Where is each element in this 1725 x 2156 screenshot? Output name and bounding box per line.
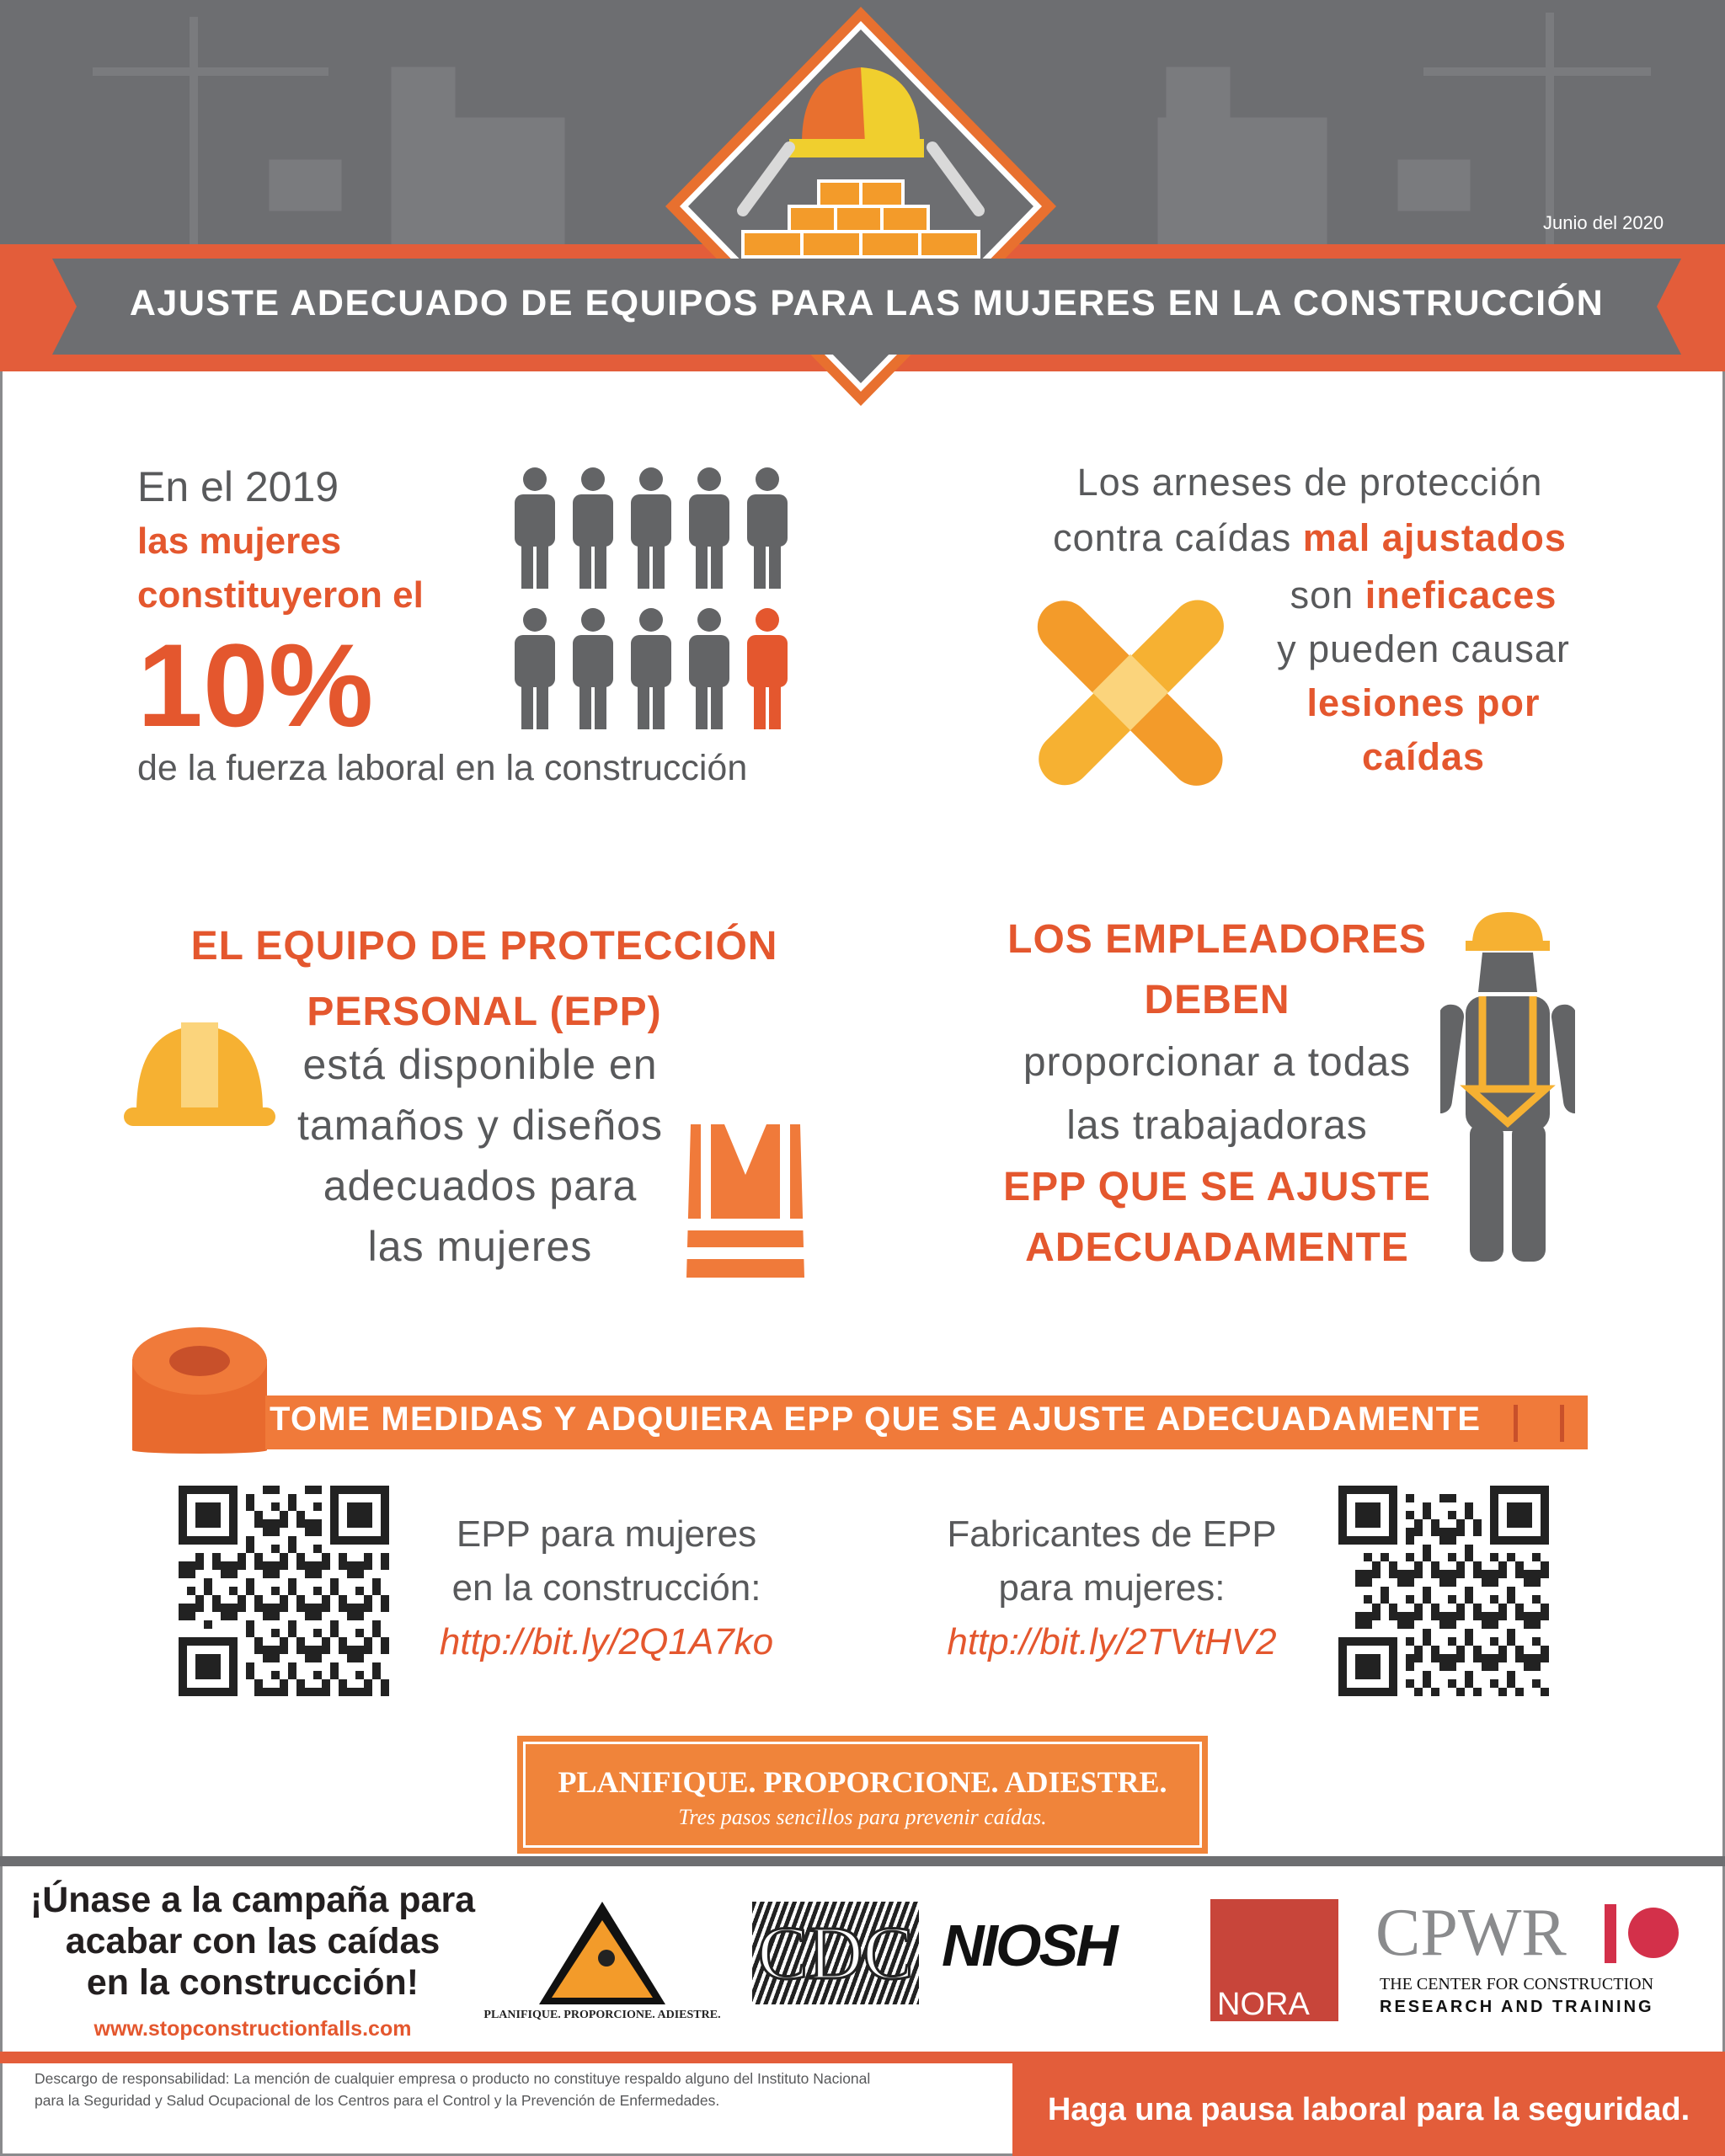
plan provide train box: Tres pasos sencillos para prevenir caídas. [678,1805,1047,1829]
harness text 2: lesiones por [1306,681,1541,724]
stat: 10%: En el 2019 [137,463,339,510]
PPE text: las mujeres [368,1223,592,1270]
link text left: http://bit.ly/2Q1A7ko [440,1621,773,1662]
slogan block [1012,2063,1725,2156]
employers heading [1003,917,1431,1270]
campaign text: www.stopconstructionfalls.com [94,2017,411,2041]
logo: CDC: CDC [757,1912,914,1995]
employers heading: ADECUADAMENTE [1025,1225,1409,1270]
people icons [515,467,788,729]
QR code left [179,1486,389,1696]
campaign text [30,1880,475,2041]
harness text [1053,461,1567,559]
logo: CPWR: THE CENTER FOR CONSTRUCTION [1380,1975,1653,1993]
logo: falls triangle: PLANIFIQUE. PROPORCIONE. ADIESTRE. [483,2009,721,2021]
logo: falls triangle [483,1902,721,2021]
employers heading: EPP QUE SE AJUSTE [1003,1165,1431,1209]
link text left: en la construcción: [452,1567,761,1609]
PPE text: está disponible en [302,1041,658,1088]
stat: 10%: 10% [137,619,373,751]
PPE text [297,1041,663,1270]
harness text 2: son ineficaces [1290,574,1557,616]
plan provide train box: PLANIFIQUE. PROPORCIONE. ADIESTRE. [558,1765,1167,1799]
harness text 2: y pueden causar [1277,627,1570,670]
logo: NIOSH: NIOSH [942,1913,1116,1978]
disclaimer: Descargo de responsabilidad: La mención de cualquier empresa o producto no constituye respaldo alguno del Instituto Nacional [35,2070,870,2087]
employers heading: LOS EMPLEADORES [1007,917,1427,962]
icon: hard hat [124,1022,275,1126]
icon: bandage [1038,600,1224,786]
link text right: para mujeres: [998,1567,1225,1609]
banner text: TOME MEDIDAS Y ADQUIERA EPP QUE SE AJUSTE ADECUADAMENTE [270,1401,1481,1438]
stat: 10%: constituyeron el [137,574,424,616]
stat: 10% [137,463,424,751]
campaign text: acabar con las caídas [66,1921,440,1961]
PPE text: tamaños y diseños [297,1102,663,1149]
diamond emblem [665,7,1056,406]
link text right: http://bit.ly/2TVtHV2 [947,1621,1277,1662]
footer orange band [0,2052,1725,2063]
tape measure banner [132,1327,1588,1454]
title ribbon [52,259,1681,355]
link text left: EPP para mujeres [457,1513,756,1555]
divider bar [0,1856,1725,1866]
link text right [947,1513,1277,1662]
icon: vest [686,1124,804,1278]
disclaimer: para la Seguridad y Salud Ocupacional de los Centros para el Control y la Prevención de Enfermedades. [35,2092,719,2109]
campaign text: en la construcción! [87,1962,419,2003]
logo: CPWR: RESEARCH AND TRAINING [1380,1998,1654,2016]
PPE text: adecuados para [323,1162,637,1209]
plan provide train box [517,1736,1208,1854]
logo: CPWR [1375,1896,1679,2016]
harness text: Los arneses de protección [1077,461,1542,504]
logo: NORA: NORA [1217,1987,1310,2022]
QR code right [1338,1486,1549,1696]
harness text: contra caídas mal ajustados [1053,516,1567,559]
employers heading: las trabajadoras [1066,1103,1368,1148]
logo: CPWR: CPWR [1375,1896,1567,1970]
disclaimer [35,2070,870,2109]
PPE heading: PERSONAL (EPP) [307,990,662,1034]
bricks [743,181,979,257]
date: Junio del 2020 [1543,212,1664,233]
stat caption: de la fuerza laboral en la construcción [137,748,747,788]
employers heading: proporcionar a todas [1023,1040,1411,1085]
slogan block: Haga una pausa laboral para la seguridad. [1048,2092,1690,2127]
PPE heading [191,923,777,1034]
wrenches [743,147,979,211]
stat: 10%: las mujeres [137,520,341,562]
campaign text: ¡Únase a la campaña para [30,1880,475,1920]
icon: woman worker [1440,912,1575,1262]
harness text 2 [1277,574,1570,778]
title: AJUSTE ADECUADO DE EQUIPOS PARA LAS MUJERES EN LA CONSTRUCCIÓN [130,283,1604,323]
employers heading: DEBEN [1144,978,1290,1022]
PPE heading: EL EQUIPO DE PROTECCIÓN [191,924,777,969]
link text right: Fabricantes de EPP [947,1513,1277,1555]
helmet [789,67,924,157]
orange band [0,244,1725,371]
header background [0,0,1725,244]
logo: NORA [1210,1899,1338,2021]
harness text 2: caídas [1362,735,1485,778]
link text left [440,1513,773,1662]
